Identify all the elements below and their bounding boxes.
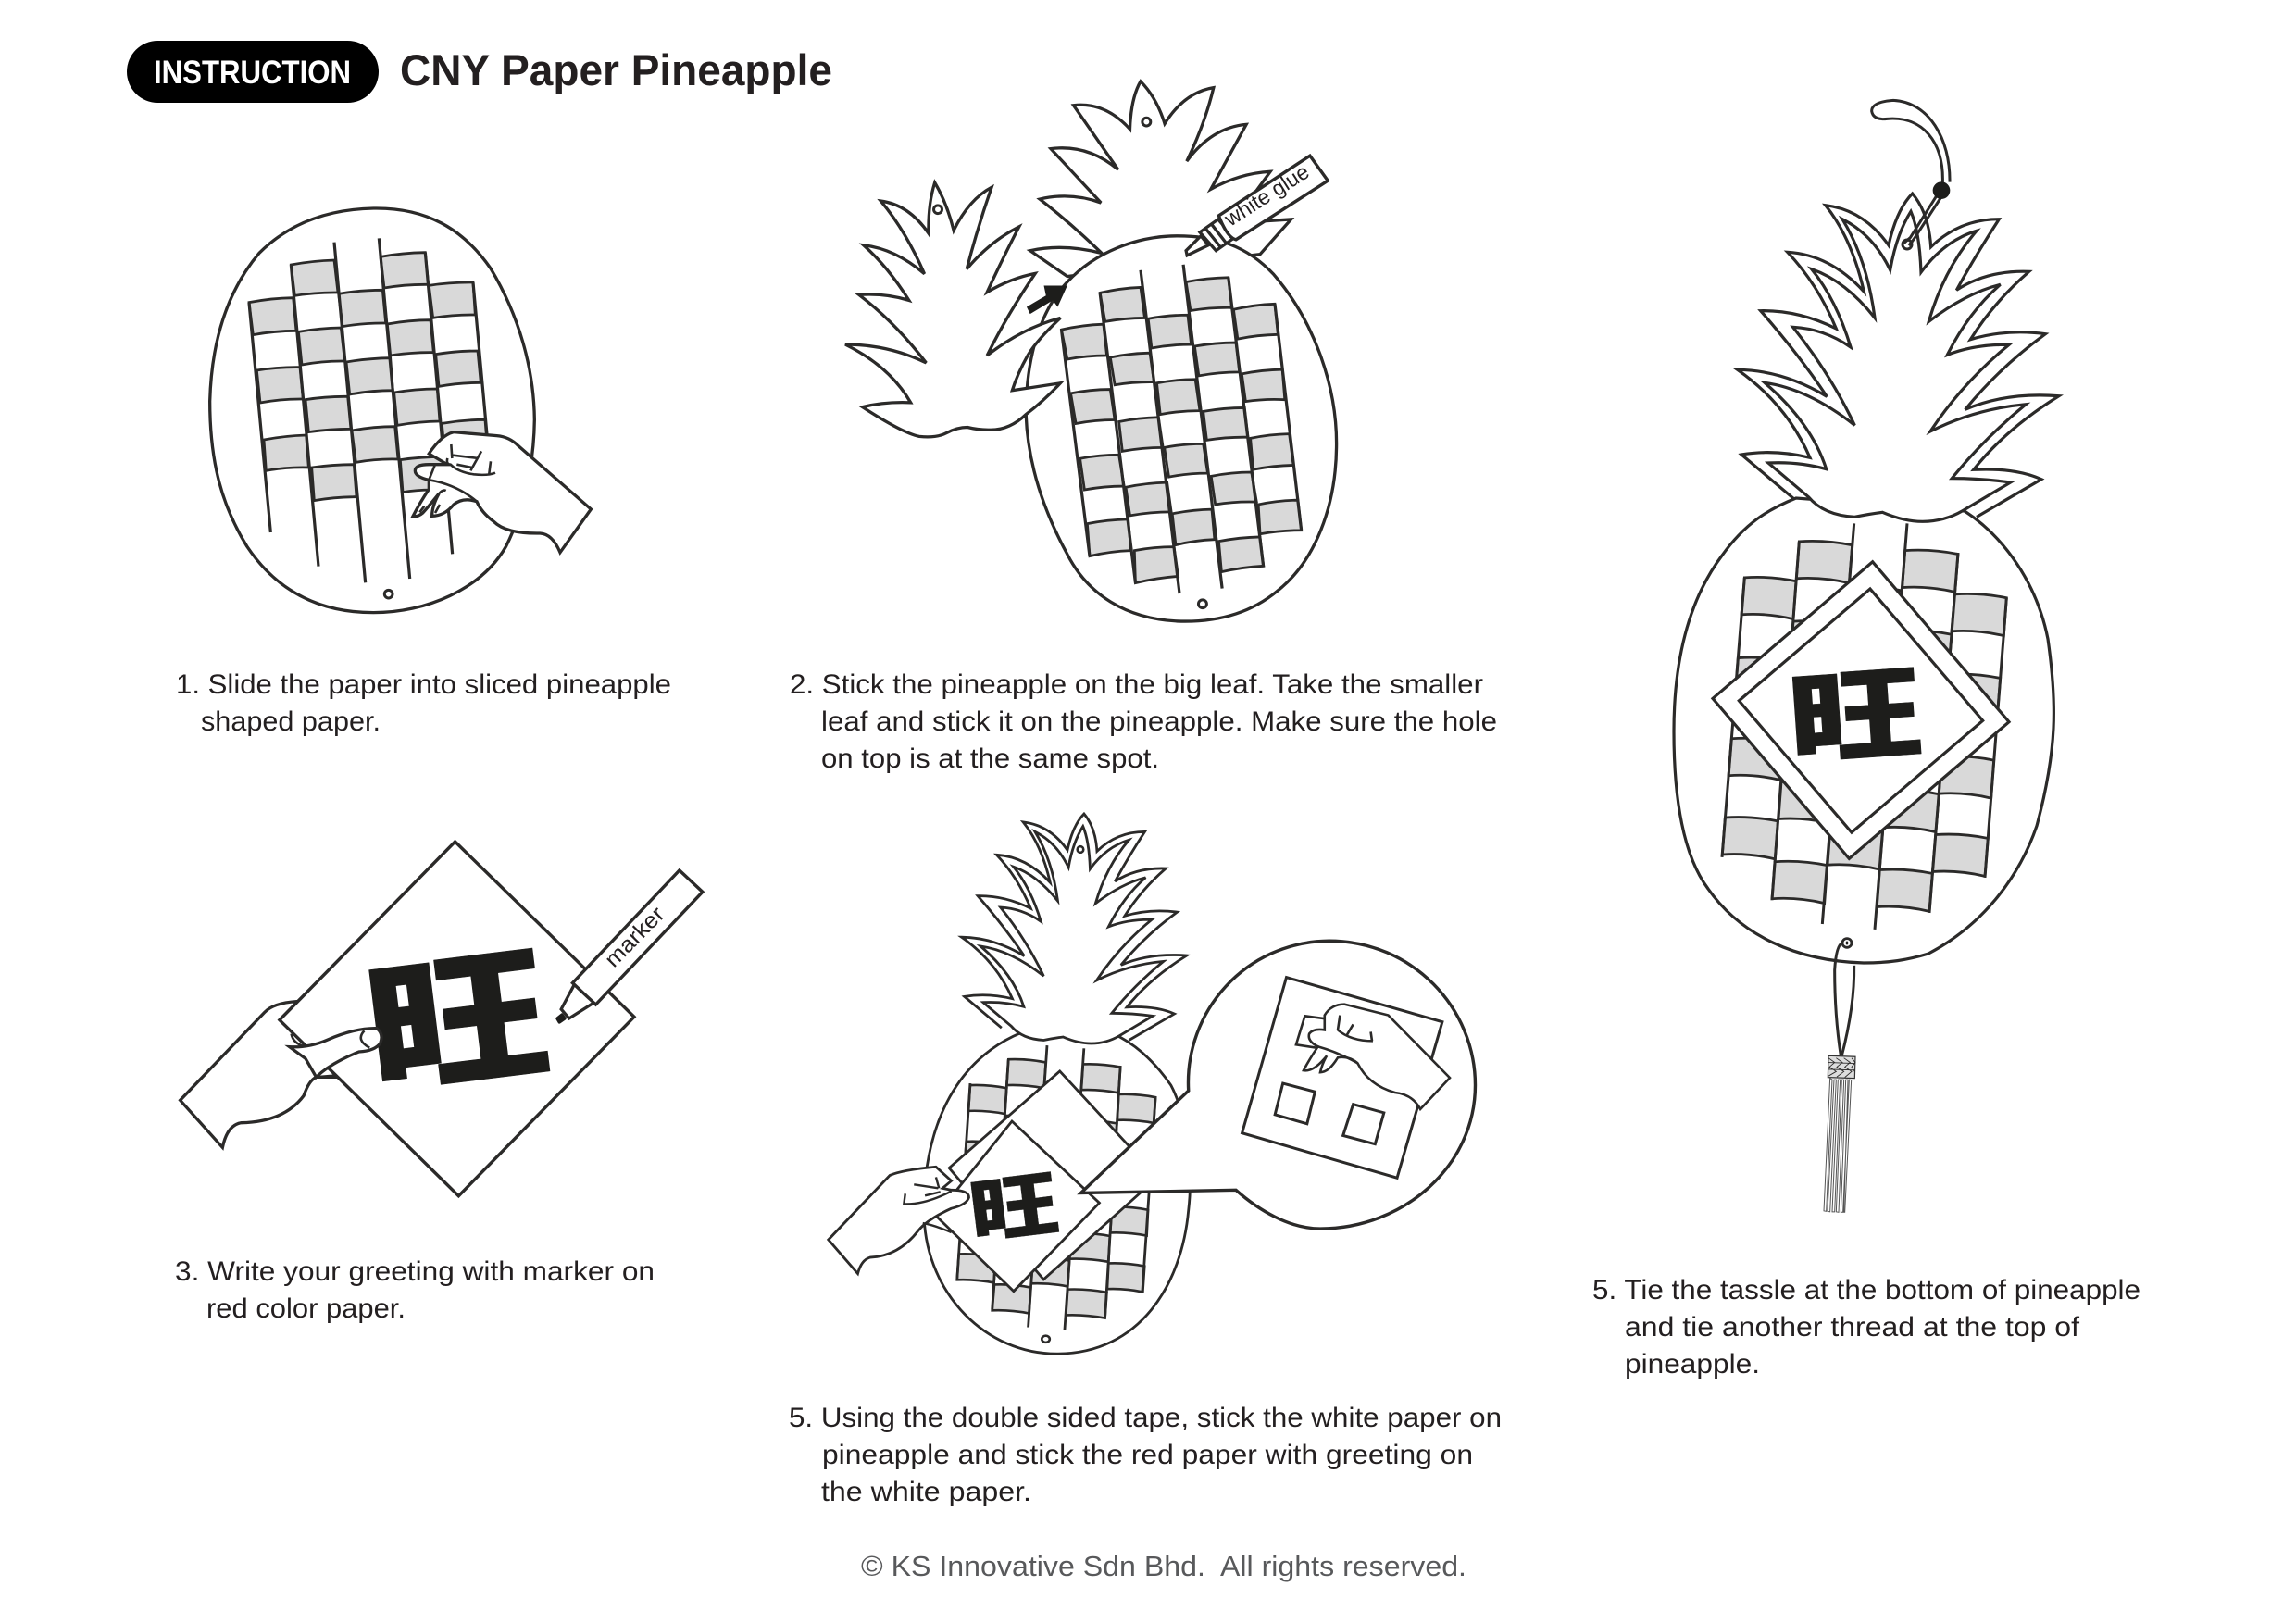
callout paper with tape squares	[1242, 978, 1442, 1178]
label: marker: marker	[600, 902, 669, 972]
red paper	[280, 842, 634, 1196]
small leaf	[845, 182, 1060, 437]
text: step 1	[176, 669, 671, 737]
text: step 3: 3. Write your greeting with marker on	[175, 1256, 655, 1287]
text: step 3: red color paper.	[206, 1293, 406, 1324]
illustration: finished pineapple leaf outer	[1738, 194, 2059, 517]
illustration: step 1 sliding paper into sliced pineapple	[210, 208, 591, 613]
header badge: INSTRUCTION: INSTRUCTION	[154, 55, 351, 91]
header badge: INSTRUCTION	[127, 41, 379, 103]
text: step 5 right: pineapple.	[1625, 1349, 1760, 1380]
text: step 2: on top is at the same spot.	[821, 743, 1159, 774]
text: step 3	[175, 1256, 655, 1324]
text: step 2	[790, 669, 1497, 774]
illustration: step 3 writing greeting with marker	[181, 842, 634, 1196]
text: step 5 right	[1592, 1275, 2140, 1380]
label: white glue: white glue	[1219, 159, 1314, 231]
text: step 5 left: the white paper.	[821, 1477, 1031, 1507]
big leaf	[1030, 81, 1291, 277]
text: step 2: 2. Stick the pineapple on the big leaf. Take the smaller	[790, 669, 1483, 700]
pineapple body with woven strips	[1026, 236, 1337, 621]
illustration: step 4 leaf outer	[962, 814, 1187, 1040]
hand palm	[181, 1002, 338, 1147]
illustration: finished pineapple papers and tassel	[1713, 562, 2009, 1212]
white paper	[949, 1071, 1158, 1280]
red paper	[936, 1121, 1099, 1292]
greeting character small: 旺	[962, 1146, 1064, 1260]
callout bubble	[1081, 941, 1475, 1229]
text: step 1: shaped paper.	[201, 706, 381, 737]
white paper	[1713, 562, 2009, 858]
illustration: step 4 leaf inner	[980, 827, 1164, 1043]
greeting character large: 旺	[1781, 631, 1927, 788]
illustration: finished pineapple leaf inner with top string	[1765, 100, 2026, 521]
hand thumb and marker	[290, 870, 703, 1077]
punch holes	[934, 118, 1206, 608]
illustration: step 4 papers, hand and zoom callout	[936, 941, 1475, 1292]
text: step 5 right: 5. Tie the tassle at the bottom of pineapple	[1592, 1275, 2140, 1305]
text: step 5 left: pineapple and stick the red paper with greeting on	[822, 1440, 1473, 1470]
text: step 1: 1. Slide the paper into sliced pineapple	[176, 669, 671, 700]
text: step 2: leaf and stick it on the pineapple. Make sure the hole	[821, 706, 1497, 737]
illustration: finished pineapple body and weave	[1674, 498, 2053, 963]
text: step 5 left	[789, 1403, 1502, 1507]
illustration: step 4 pineapple body and woven grid	[924, 1022, 1190, 1354]
text: step 5 left: 5. Using the double sided tape, stick the white paper on	[789, 1403, 1502, 1433]
hand holding red paper	[829, 1167, 969, 1274]
glue bottle	[1186, 156, 1328, 256]
text: step 5 right: and tie another thread at the top of	[1625, 1312, 2080, 1342]
top string with bead	[1872, 100, 1950, 249]
greeting character: 旺	[351, 894, 559, 1128]
arrow	[1027, 285, 1067, 314]
footer copyright: © KS Innovative Sdn Bhd. All rights reserved.	[861, 1550, 1466, 1582]
title: CNY Paper Pineapple	[400, 45, 832, 94]
red paper	[1739, 589, 1983, 832]
tassel	[1824, 939, 1855, 1212]
illustration: step 2 leaves and pineapple with white glue	[845, 81, 1337, 621]
callout hand	[1296, 1005, 1450, 1109]
